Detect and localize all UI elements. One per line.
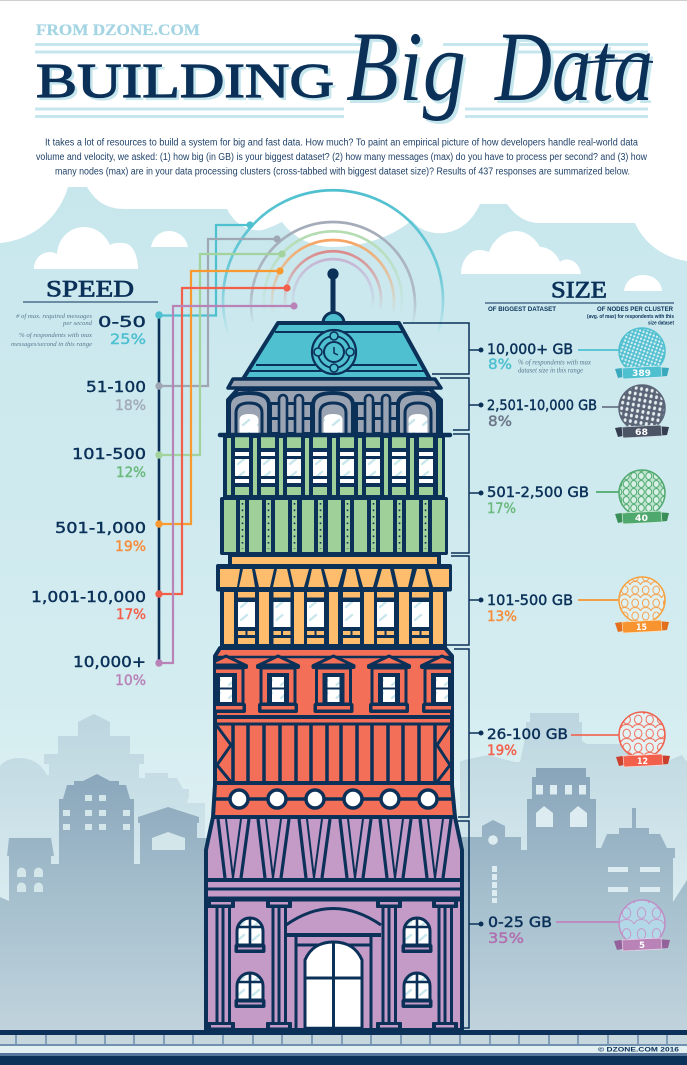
green upper floor (223, 435, 445, 497)
connector: 101-500 green (155, 250, 286, 459)
node ball: 5 (556, 900, 670, 951)
red windows (204, 656, 464, 713)
title: big data: Big (349, 14, 469, 125)
node ball: 40 (596, 470, 669, 524)
node ball: 389 (578, 328, 669, 379)
node ball: 15 (578, 577, 669, 633)
timber braces (218, 819, 451, 878)
node ball: 389: 389 (632, 369, 651, 379)
intro paragraph (36, 138, 648, 178)
speed percentages (110, 332, 146, 689)
speed labels: 501-1,000 (55, 519, 146, 537)
node ball: 12 (571, 712, 670, 767)
speed percentages: 17% (116, 607, 146, 623)
node ball: 5: 5 (639, 941, 645, 951)
entrance (286, 908, 381, 1030)
size note: dataset size in this range (518, 368, 583, 374)
intro paragraph: many nodes (max) are in your data processing clusters (cross-tabbed with biggest dataset size)? Results of 437 responses are summarized below. (55, 166, 630, 178)
speed percentages: 18% (115, 398, 146, 414)
connector: 51-100 gray (155, 235, 281, 390)
speed heading: SPEED (46, 276, 134, 302)
signal arcs (223, 190, 443, 333)
eyebrow: from dzone.com: FROM DZONE.COM (36, 22, 200, 39)
node ball: 68: 68 (635, 428, 648, 438)
size note: % of respondents with max (518, 360, 591, 366)
size column captions: OF BIGGEST DATASET (488, 306, 556, 313)
clouds (34, 227, 662, 291)
near skyline right (455, 768, 687, 1031)
speed labels (31, 313, 146, 671)
top border (0, 0, 687, 1)
connector: 501-1,000 orange (155, 267, 284, 528)
node ball: 15: 15 (636, 623, 647, 633)
size percentages: 35% (488, 931, 524, 947)
speed labels: 0-50 (98, 313, 146, 331)
near skyline left (0, 774, 215, 1031)
size heading: SIZE (551, 278, 607, 302)
title flourish (575, 61, 653, 64)
node ball: 40: 40 (635, 514, 648, 524)
teal roof (243, 323, 430, 379)
speed percentages: 10% (115, 673, 146, 689)
size labels: 26-100 GB (487, 727, 568, 743)
size note (518, 360, 591, 374)
antenna (323, 268, 344, 323)
size labels: 0-25 GB (488, 915, 552, 931)
size labels: 501-2,500 GB (487, 485, 589, 501)
title: building: BUILDING (38, 56, 336, 110)
speed notes: per second (62, 320, 93, 327)
size percentages: 13% (487, 609, 517, 625)
size column captions: (avg. of max) for respondents with this (587, 314, 674, 320)
title: big data: Big (346, 11, 466, 122)
size column captions: size dataset (648, 320, 674, 326)
size labels: 10,000+ GB (487, 342, 573, 358)
speed labels: 1,001-10,000 (31, 588, 146, 606)
title: big data (346, 11, 656, 125)
building (204, 268, 464, 1031)
title stripes (35, 43, 648, 118)
speed notes: messages/second in this range (11, 341, 92, 348)
green lower floor (220, 497, 448, 555)
clock (312, 330, 356, 374)
size labels: 2,501-10,000 GB (487, 398, 597, 414)
node ball: 12: 12 (637, 757, 648, 767)
size column captions (488, 306, 674, 326)
title: building: BUILDING (36, 53, 334, 108)
red floor (204, 648, 464, 817)
size percentages: 17% (487, 501, 516, 517)
speed axis (158, 315, 160, 663)
connector: 1,001-10,000 red (155, 284, 291, 598)
size column captions: OF NODES PER CLUSTER (597, 306, 673, 313)
speed labels: 101-500 (72, 445, 146, 463)
speed notes: % of respondents with max (19, 332, 92, 339)
orange frieze (216, 555, 452, 592)
speed notes (11, 313, 93, 348)
speed labels: 10,000+ (73, 653, 146, 671)
arched windows (234, 918, 432, 1008)
size labels: 101-500 GB (487, 593, 573, 609)
size labels (487, 342, 597, 931)
timber band (217, 725, 450, 783)
intro paragraph: It takes a lot of resources to build a system for big and fast data. How much? To paint an empirical picture of how developers handle real-world data (45, 138, 638, 148)
bracket dots (478, 348, 484, 926)
size percentages: 19% (487, 743, 517, 759)
copyright: © DZONE.COM 2016 (598, 1046, 680, 1054)
speed percentages: 25% (110, 332, 146, 348)
connector: 10,000+ purple (155, 302, 298, 667)
speed percentages: 12% (116, 465, 146, 481)
street and sidewalk (0, 1030, 687, 1065)
node ball: 68 (602, 385, 669, 438)
far skyline (0, 713, 687, 900)
speed heading (23, 276, 158, 302)
size percentages: 8% (488, 357, 512, 373)
speed labels: 51-100 (86, 378, 146, 396)
columns (207, 900, 458, 1031)
gray attic (228, 379, 441, 437)
speed percentages: 19% (115, 539, 146, 555)
speed notes: # of max. required messages (16, 313, 93, 320)
orange floor (220, 590, 447, 648)
size percentages: 8% (488, 414, 512, 430)
attic arched windows (229, 393, 438, 437)
size brackets (403, 323, 480, 1028)
size percentages (487, 357, 524, 947)
connector: 0-50 teal (155, 221, 254, 319)
purple floor (206, 817, 462, 1031)
floor ledge (220, 433, 450, 437)
porthole band (215, 790, 452, 808)
